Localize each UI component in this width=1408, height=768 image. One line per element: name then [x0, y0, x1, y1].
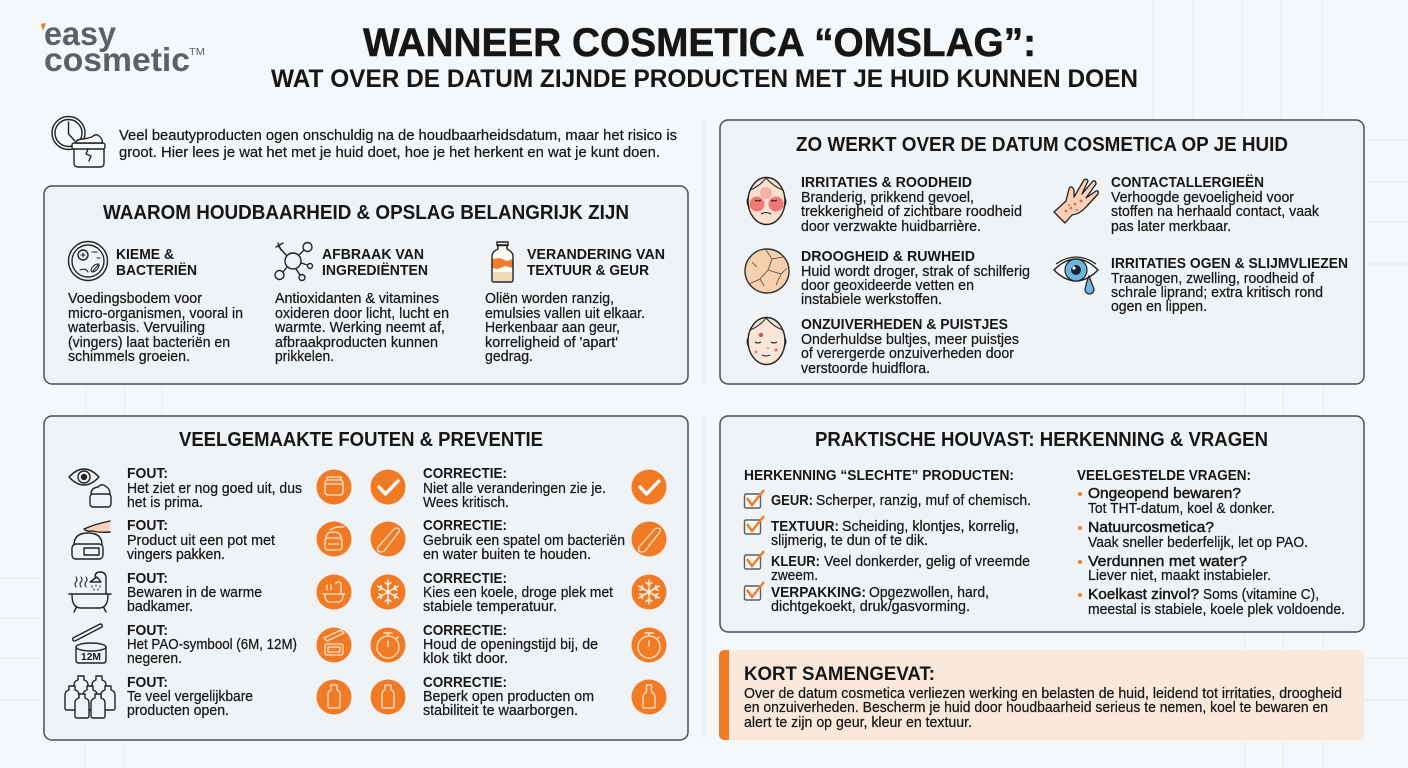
check: kleur: zweem.: [771, 568, 818, 584]
row 3 correctie: CORRECTIE:: [423, 570, 507, 587]
row 2 icon: orange spatula right: [632, 522, 666, 556]
row 1 correctie: [423, 465, 606, 511]
sub-heading: kieme en bacterien: KIEME &: [116, 246, 174, 263]
row 1 icon: orange check: [370, 470, 406, 504]
logo: easy cosmetic: easy: [44, 15, 117, 52]
text: kieme: Voedingsbodem voor: [68, 291, 202, 307]
panel: praktische houvast: [720, 416, 1364, 632]
sub-heading: veelgestelde vragen: VEELGESTELDE VRAGEN:: [1077, 468, 1251, 484]
row 2 fout: vingers pakken.: [127, 547, 225, 563]
text: contactallergieen: CONTACTALLERGIEËN: [1111, 174, 1264, 191]
icon: separated bottle: [492, 242, 513, 282]
icon: teary eye: [1054, 257, 1098, 294]
logo: easy cosmetic: [41, 15, 205, 78]
row 2 icon: orange spatula: [370, 522, 406, 556]
row 2 fout: [127, 517, 275, 563]
faq: koelkast zinvol: Koelkast zinvol?: [1088, 586, 1199, 603]
row 3 icon: bathtub: [69, 572, 111, 612]
callout text: [744, 686, 1342, 731]
row 3 fout: Bewaren in de warme: [127, 585, 262, 601]
text: afbraak: oxideren door licht, lucht en: [275, 306, 449, 322]
panel: zo werkt over de datum cosmetica: [720, 120, 1364, 384]
faq: ongeopend bewaren: Tot THT-datum, koel & donker.: [1088, 501, 1275, 517]
text: kieme: (vingers) laat bacteriën en: [68, 335, 230, 351]
row 4 correctie: CORRECTIE:: [423, 622, 507, 639]
text: kieme: waterbasis. Vervuiling: [67, 320, 205, 336]
heading: VEELGEMAAKTE FOUTEN & PREVENTIE: [179, 429, 543, 451]
row 4 fout: Het PAO-symbool (6M, 12M): [127, 637, 297, 653]
row 5 fout: Te veel vergelijkbare: [127, 689, 253, 705]
row 2 fout: Product uit een pot met: [127, 533, 275, 549]
row 3 fout: [127, 570, 262, 615]
icon: face with pimples: [747, 318, 786, 364]
row 1 icon: orange check right: [632, 470, 666, 504]
sub-heading: afbraak: [322, 246, 428, 279]
row 5 correctie: CORRECTIE:: [423, 674, 507, 691]
sub-heading: kieme en bacterien: [116, 246, 197, 279]
row 4 correctie: [423, 622, 598, 667]
text: onzuiverheden: verstoorde huidflora.: [801, 361, 930, 377]
row 5 fout: [127, 674, 253, 719]
panel: waarom houdbaarheid: [44, 186, 688, 384]
text: irritaties en roodheid: [801, 174, 1022, 235]
faq: natuurcosmetica: Natuurcosmetica?: [1088, 519, 1214, 536]
icon: molecule: [275, 242, 312, 280]
row 5 fout: producten open.: [127, 703, 229, 719]
text: irritaties en roodheid: IRRITATIES & ROODHEID: [801, 174, 972, 191]
callout text: alert te zijn op geur, kleur en textuur.: [744, 715, 972, 731]
text: droogheid: door geoxideerde vetten en: [801, 278, 974, 294]
row 4 icon: orange stopwatch: [370, 628, 406, 662]
row 2 correctie: [423, 517, 625, 563]
text: kieme: [67, 291, 243, 365]
row 2 correctie: Gebruik een spatel om bacteriën: [423, 533, 625, 549]
row 5 icon: orange slim bottle: [632, 680, 666, 714]
icon: petri dish: [68, 242, 108, 280]
check: textuur: TEXTUUR:: [771, 519, 839, 535]
faq: ongeopend bewaren: [1078, 485, 1275, 517]
check: verpakking: Opgezwollen, hard,: [869, 585, 989, 601]
row 4 correctie: Houd de openingstijd bij, de: [423, 637, 598, 653]
text: afbraak: prikkelen.: [275, 349, 334, 365]
row 2 icon: fingers in jar: [72, 521, 110, 559]
row 1 correctie: Niet alle veranderingen zie je.: [423, 481, 606, 497]
check: verpakking: dichtgekoekt, druk/gasvorming.: [771, 599, 970, 615]
faq: verdunnen met water: Verdunnen met water?: [1088, 553, 1247, 570]
logo: easy cosmetic: TM: [189, 47, 205, 58]
text: irritaties ogen: Traanogen, zwelling, roodheid of: [1111, 271, 1315, 287]
text: afbraak: [274, 291, 449, 365]
icon: face with redness: [747, 178, 786, 224]
text: irritaties ogen: ogen en lippen.: [1111, 299, 1207, 315]
row 1 icon: eye and jar: [69, 469, 111, 507]
text: kieme: micro-organismen, vooral in: [68, 306, 243, 322]
row 4 correctie: klok tikt door.: [423, 651, 508, 667]
callout heading: KORT SAMENGEVAT:: [744, 663, 935, 685]
callout text: en onzuiverheden. Bescherm je huid door houdbaarheid serieus te nemen, koel te bewaren en: [744, 700, 1328, 716]
row 3 icon: orange snowflake right: [632, 574, 666, 610]
text: droogheid: [801, 248, 1030, 308]
title: WAT OVER DE DATUM ZIJNDE PRODUCTEN MET JE HUID KUNNEN DOEN: [271, 65, 1138, 93]
heading: ZO WERKT OVER DE DATUM COSMETICA OP JE HUID: [796, 134, 1288, 156]
icon: clock and cracked jar: [52, 116, 105, 167]
row 4 fout: FOUT:: [127, 622, 168, 639]
sub-heading: herkenning: HERKENNING “SLECHTE” PRODUCTEN:: [744, 468, 1014, 484]
callout: kort samengevat: [719, 650, 1364, 740]
text: contactallergieen: stoffen na herhaald contact, vaak: [1111, 204, 1320, 220]
row 4 fout: [127, 622, 297, 667]
text: afbraak: warmte. Werking neemt af,: [274, 320, 445, 336]
text: afbraak: Antioxidanten & vitamines: [275, 291, 439, 307]
check: kleur: Veel donkerder, gelig of vreemde: [824, 554, 1030, 570]
text: onzuiverheden: ONZUIVERHEDEN & PUISTJES: [801, 316, 1008, 333]
row 5 correctie: [423, 674, 594, 719]
faq: natuurcosmetica: Vaak sneller bederfelijk, let op PAO.: [1088, 535, 1308, 551]
text: irritaties en roodheid: Branderig, prikkend gevoel,: [801, 190, 974, 206]
check: geur: GEUR:: [771, 493, 813, 509]
row 3 icon: orange snowflake: [370, 574, 406, 610]
text: verandering: Oliën worden ranzig,: [485, 291, 614, 307]
row 3 correctie: [423, 570, 613, 615]
row 1 correctie: Wees kritisch.: [423, 495, 509, 511]
row 1 fout: [127, 465, 302, 511]
text: irritaties ogen: schrale liprand; extra kritisch rond: [1111, 285, 1323, 301]
row 1 fout: het is prima.: [127, 495, 203, 511]
title: [271, 21, 1138, 93]
faq: koelkast zinvol: [1078, 586, 1345, 618]
row 3 icon: orange bathtub: [316, 574, 352, 610]
panel: veelgemaakte fouten: [44, 416, 688, 740]
check: geur: [744, 490, 1031, 509]
text: verandering: [485, 291, 645, 365]
row 1 fout: Het ziet er nog goed uit, dus: [127, 481, 302, 497]
row 5 icon: orange bottle: [316, 680, 352, 714]
sub-heading: afbraak: INGREDIËNTEN: [322, 262, 428, 279]
heading: PRAKTISCHE HOUVAST: HERKENNING & VRAGEN: [815, 429, 1268, 451]
sub-heading: kieme en bacterien: BACTERIËN: [116, 262, 197, 279]
text: irritaties en roodheid: trekkerigheid of zichtbare roodheid: [801, 204, 1022, 220]
row 4 icon: PAO jar 12M: [73, 624, 106, 663]
row 1 fout: FOUT:: [127, 465, 168, 482]
text: irritaties en roodheid: door verzwakte huidbarrière.: [801, 219, 981, 235]
row 4 icon: orange PAO jar: [316, 628, 352, 662]
row 1 icon: orange jar: [316, 470, 352, 504]
text: kieme: schimmels groeien.: [68, 349, 190, 365]
text: droogheid: DROOGHEID & RUWHEID: [801, 248, 975, 265]
check: textuur: slijmerig, te dun of te dik.: [771, 533, 928, 549]
text: irritaties ogen: [1111, 255, 1348, 315]
check: geur: Scherper, ranzig, muf of chemisch.: [816, 493, 1031, 509]
row 3 fout: FOUT:: [127, 570, 168, 587]
faq: koelkast zinvol: Soms (vitamine C),: [1203, 587, 1319, 603]
intro text: Veel beautyproducten ogen onschuldig na de houdbaarheidsdatum, maar het risico is: [119, 127, 677, 144]
row 3 correctie: Kies een koele, droge plek met: [423, 585, 613, 601]
sub-heading: afbraak: AFBRAAK VAN: [322, 246, 424, 263]
text: verandering: Herkenbaar aan geur,: [485, 320, 620, 336]
row 5 correctie: stabiliteit te waarborgen.: [423, 703, 578, 719]
faq: verdunnen met water: Liever niet, maakt instabieler.: [1088, 568, 1271, 584]
text: onzuiverheden: of verergerde onzuiverheden door: [801, 346, 1014, 362]
row 2 correctie: en water buiten te houden.: [423, 547, 591, 563]
intro text: groot. Hier lees je wat het met je huid doet, hoe je het herkent en wat je kunt doen.: [119, 144, 660, 161]
row 4 icon: PAO jar 12M: 12M: [81, 652, 101, 663]
row 5 correctie: Beperk open producten om: [423, 689, 594, 705]
logo: easy cosmetic: cosmetic: [44, 41, 190, 78]
faq: ongeopend bewaren: Ongeopend bewaren?: [1088, 485, 1241, 502]
text: verandering: korreligheid of 'apart': [485, 335, 618, 351]
check: kleur: KLEUR:: [771, 554, 820, 570]
row 2 correctie: CORRECTIE:: [423, 517, 507, 534]
row 1 correctie: CORRECTIE:: [423, 465, 507, 482]
text: afbraak: afbraakproducten kunnen: [275, 335, 438, 351]
row 5 fout: FOUT:: [127, 674, 168, 691]
text: contactallergieen: [1111, 174, 1320, 235]
row 2 fout: FOUT:: [127, 517, 168, 534]
text: irritaties ogen: IRRITATIES OGEN & SLIJMVLIEZEN: [1111, 255, 1348, 272]
sub-heading: verandering: TEXTUUR & GEUR: [527, 262, 649, 279]
text: contactallergieen: Verhoogde gevoeligheid voor: [1111, 190, 1294, 206]
sub-heading: verandering: VERANDERING VAN: [527, 246, 665, 263]
faq: verdunnen met water: [1078, 553, 1271, 584]
callout text: Over de datum cosmetica verliezen werking en belasten de huid, leidend tot irritaties, droogheid: [744, 686, 1342, 702]
icon: hand with rash: [1054, 179, 1098, 223]
row 3 correctie: stabiele temperatuur.: [423, 599, 557, 615]
check: kleur: [744, 551, 1030, 584]
icon: cracked dry skin: [745, 249, 789, 293]
text: onzuiverheden: [801, 316, 1019, 377]
row 5 icon: many bottles: [65, 676, 115, 718]
row 3 fout: badkamer.: [127, 599, 193, 615]
text: droogheid: Huid wordt droger, strak of schilferig: [801, 264, 1030, 280]
check: verpakking: VERPAKKING:: [771, 585, 866, 601]
check: verpakking: [744, 582, 989, 615]
text: onzuiverheden: Onderhuldse bultjes, meer puistjes: [801, 332, 1019, 348]
row 4 fout: negeren.: [127, 651, 182, 667]
row 4 icon: orange stopwatch right: [632, 628, 666, 662]
intro text: [119, 127, 677, 161]
faq: koelkast zinvol: meestal is stabiele, koele plek voldoende.: [1088, 602, 1345, 618]
text: droogheid: instabiele werkstoffen.: [801, 292, 942, 308]
text: verandering: gedrag.: [485, 349, 533, 365]
check: textuur: [744, 516, 1019, 549]
row 2 icon: orange jar with hand: [316, 522, 352, 556]
title: WANNEER COSMETICA “OMSLAG”:: [363, 21, 1036, 65]
row 5 icon: orange bottle 2: [370, 680, 406, 714]
text: verandering: emulsies vallen uit elkaar.: [485, 306, 645, 322]
heading: WAAROM HOUDBAARHEID & OPSLAG BELANGRIJK ZIJN: [103, 202, 629, 224]
check: textuur: Scheiding, klontjes, korrelig,: [842, 519, 1019, 535]
text: contactallergieen: pas later merkbaar.: [1111, 219, 1231, 235]
sub-heading: verandering: [527, 246, 665, 279]
faq: natuurcosmetica: [1078, 519, 1308, 551]
